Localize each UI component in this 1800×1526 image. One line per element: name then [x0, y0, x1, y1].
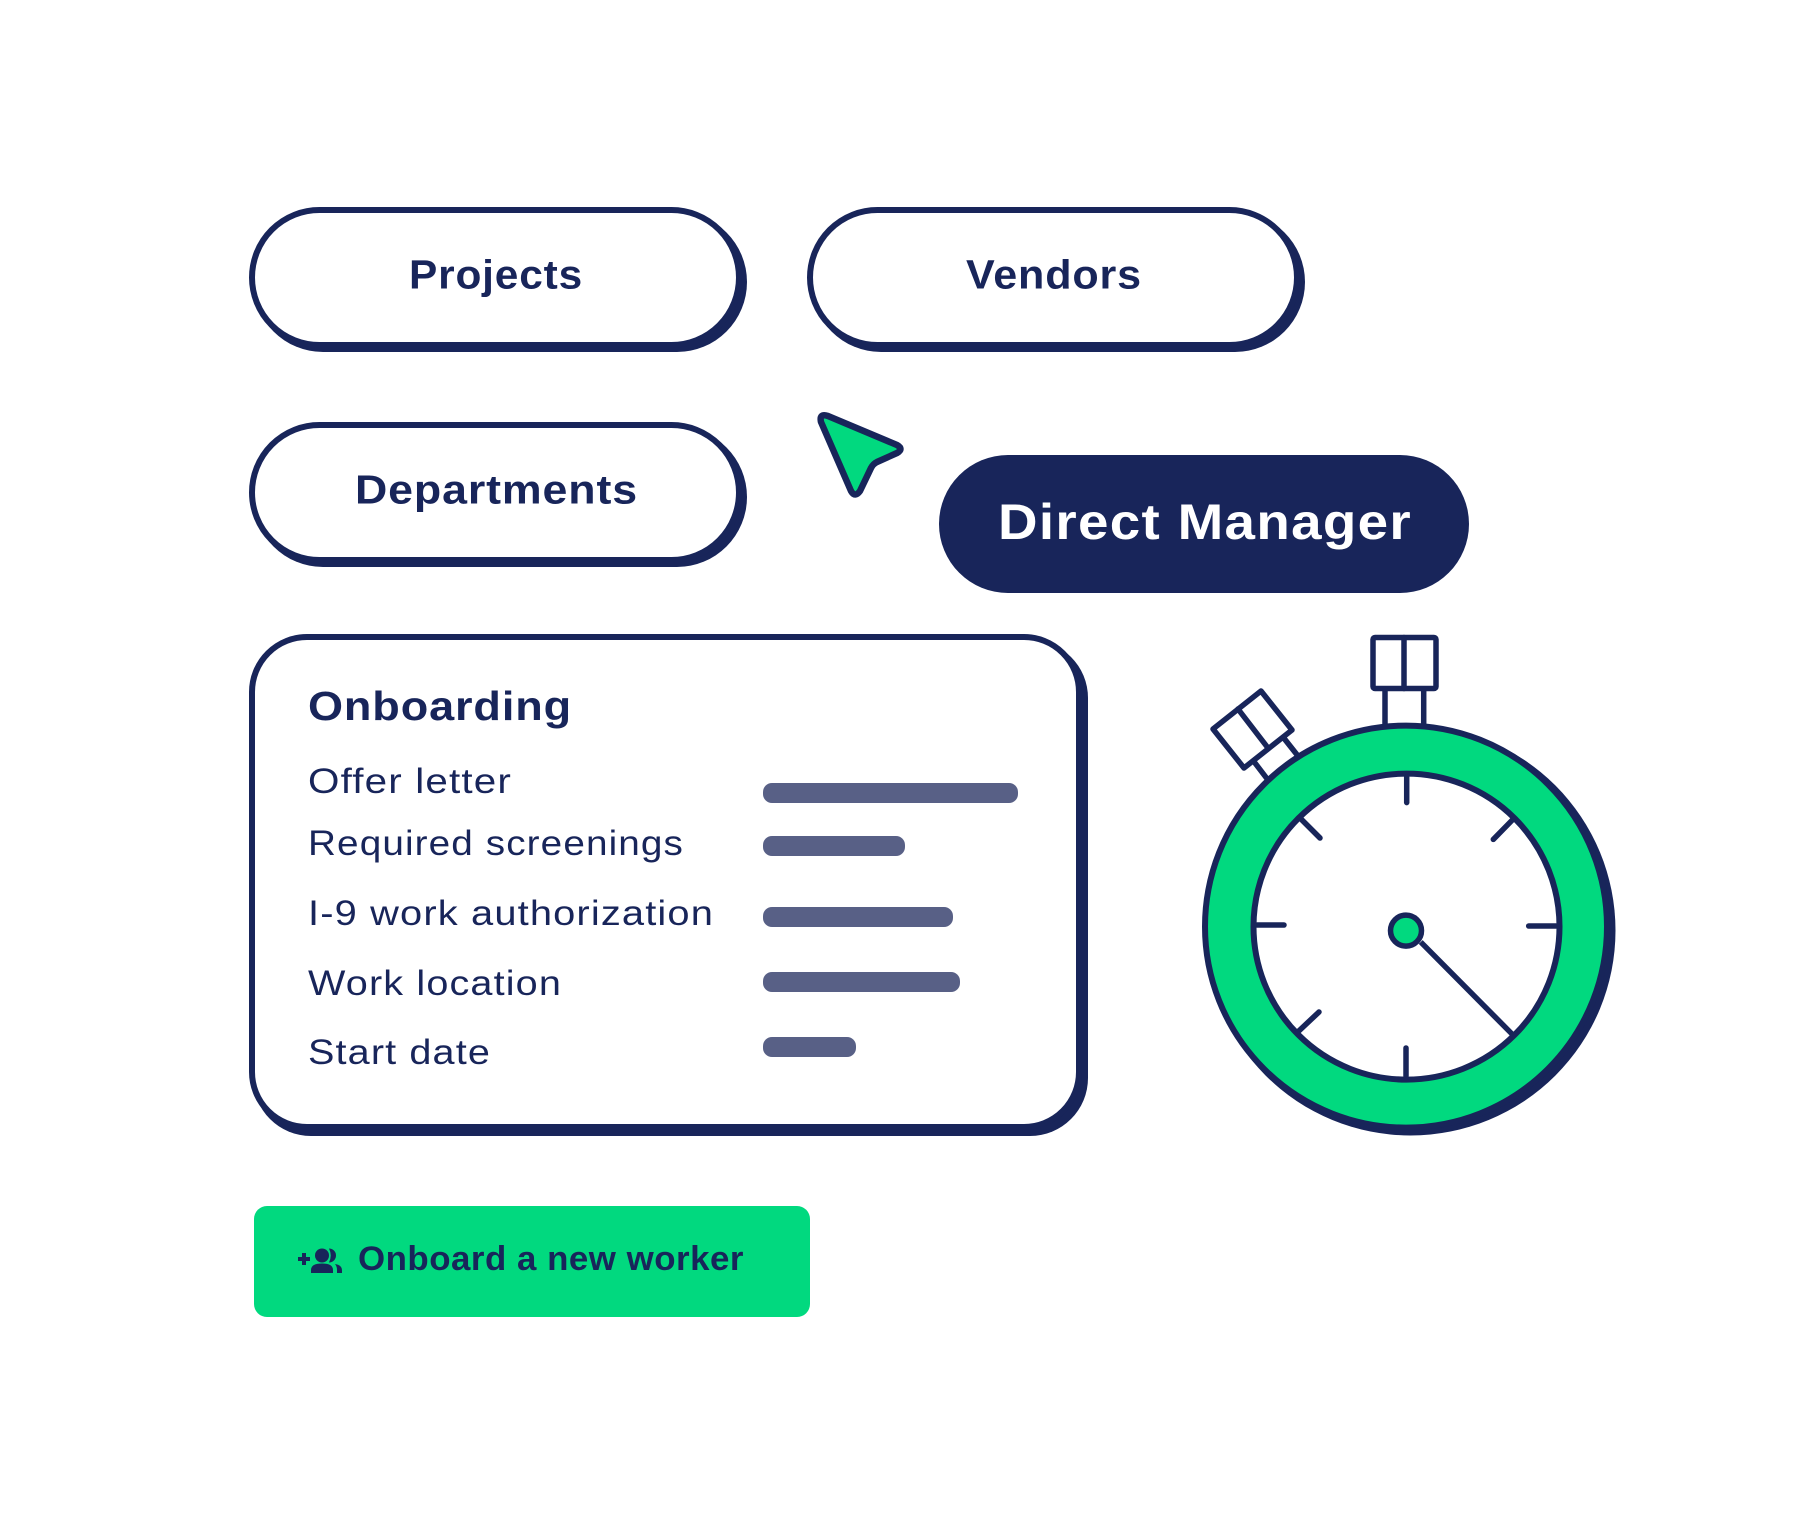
green ring	[1205, 726, 1607, 1128]
button: Onboard a new worker	[254, 1206, 810, 1317]
pill: Vendors	[810, 210, 1305, 352]
row: Offer letter: Offer letter	[308, 762, 512, 801]
pill: Direct Manager (selected)	[939, 455, 1469, 593]
row: Work location	[308, 964, 960, 1003]
pill: Departments	[252, 425, 747, 567]
row: Start date: Start date	[308, 1033, 491, 1072]
hand	[1421, 942, 1513, 1035]
panel: Onboarding checklist	[252, 637, 1088, 1136]
pill: Departments: Departments	[355, 466, 638, 512]
shadow	[1206, 726, 1616, 1136]
row: I-9 work authorization	[308, 894, 953, 933]
tick marks	[1257, 777, 1556, 1076]
heading: Onboarding: Onboarding	[308, 683, 572, 729]
pill: Vendors: Vendors	[966, 252, 1142, 298]
row: Required screenings	[308, 824, 905, 863]
dial face	[1254, 774, 1560, 1080]
row: Required screenings: Required screenings	[308, 824, 684, 863]
top crown	[1373, 638, 1436, 730]
pill: Direct Manager (selected): Direct Manager	[998, 494, 1412, 550]
row: I-9 work authorization: I-9 work authorization	[308, 894, 714, 933]
row: Work location: Work location	[308, 964, 562, 1003]
side crown	[1213, 691, 1298, 780]
pill: Projects	[252, 210, 747, 352]
icon: add people	[298, 1248, 342, 1273]
button: Onboard a new worker: Onboard a new worker	[358, 1240, 744, 1278]
icon: cursor arrow	[821, 415, 900, 494]
centre pin	[1390, 915, 1422, 946]
icon: stopwatch	[1205, 638, 1616, 1136]
row: Start date	[308, 1033, 856, 1072]
row: Offer letter	[308, 762, 1018, 803]
pill: Projects: Projects	[409, 252, 583, 298]
